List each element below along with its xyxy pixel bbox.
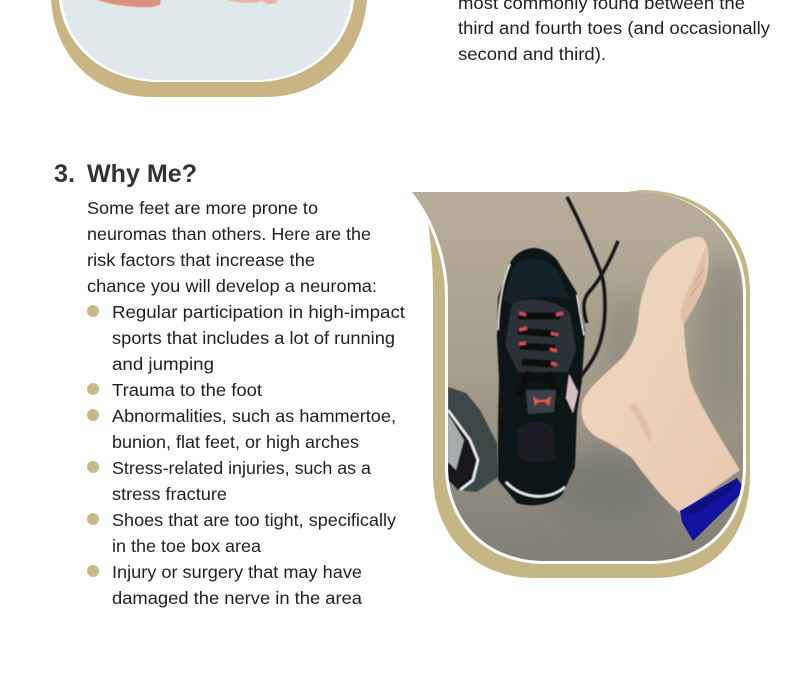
intro text: neuromas than others. Here are the: [87, 224, 371, 244]
bullet: abnormalities: Abnormalities, such as hammertoe,: [112, 406, 396, 426]
photo frame: feet on pale background: [51, 0, 367, 97]
photo frame: sneakers and bare foot: [405, 190, 753, 578]
heading: 3. Why Me?: Why Me?: [87, 160, 197, 188]
bullet: high-impact sports: sports that includes a lot of running: [112, 328, 395, 348]
bullet: injury or surgery: damaged the nerve in the area: [112, 588, 362, 608]
intro text: [87, 198, 377, 296]
bullet: high-impact sports: and jumping: [112, 354, 214, 374]
bullet: tight shoes: in the toe box area: [112, 536, 261, 556]
heading: 3. Why Me?: 3.: [54, 160, 75, 188]
bullet: injury or surgery: Injury or surgery that may have: [112, 562, 362, 582]
intro text: Some feet are more prone to: [87, 198, 318, 218]
risk factor list: [87, 302, 405, 608]
body text: nerve location, continued: third and fourth toes (and occasionally: [458, 18, 770, 38]
bullet: injury or surgery: [87, 562, 362, 608]
bullet: abnormalities: [87, 406, 396, 452]
bullet: high-impact sports: Regular participation in high-impact: [112, 302, 405, 322]
bullet: stress injuries: Stress-related injuries, such as a: [112, 458, 371, 478]
intro text: chance you will develop a neuroma:: [87, 276, 377, 296]
left sneaker: [448, 387, 498, 492]
body text: nerve location, continued: [458, 0, 770, 64]
bullet: abnormalities: bunion, flat feet, or high arches: [112, 432, 359, 452]
bullet: high-impact sports: [87, 302, 405, 374]
bullet: tight shoes: Shoes that are too tight, specifically: [112, 510, 396, 530]
bullet: stress injuries: [87, 458, 371, 504]
body text: nerve location, continued: second and third).: [458, 44, 606, 64]
sleeve cuff: [680, 478, 745, 541]
concrete shading: [550, 255, 753, 530]
bullet: tight shoes: [87, 510, 396, 556]
shoelaces: [567, 197, 618, 381]
bullet: stress injuries: stress fracture: [112, 484, 227, 504]
center sneaker: [497, 248, 585, 505]
bullet: trauma: Trauma to the foot: [112, 380, 262, 400]
bare foot: [581, 237, 740, 513]
intro text: risk factors that increase the: [87, 250, 315, 270]
